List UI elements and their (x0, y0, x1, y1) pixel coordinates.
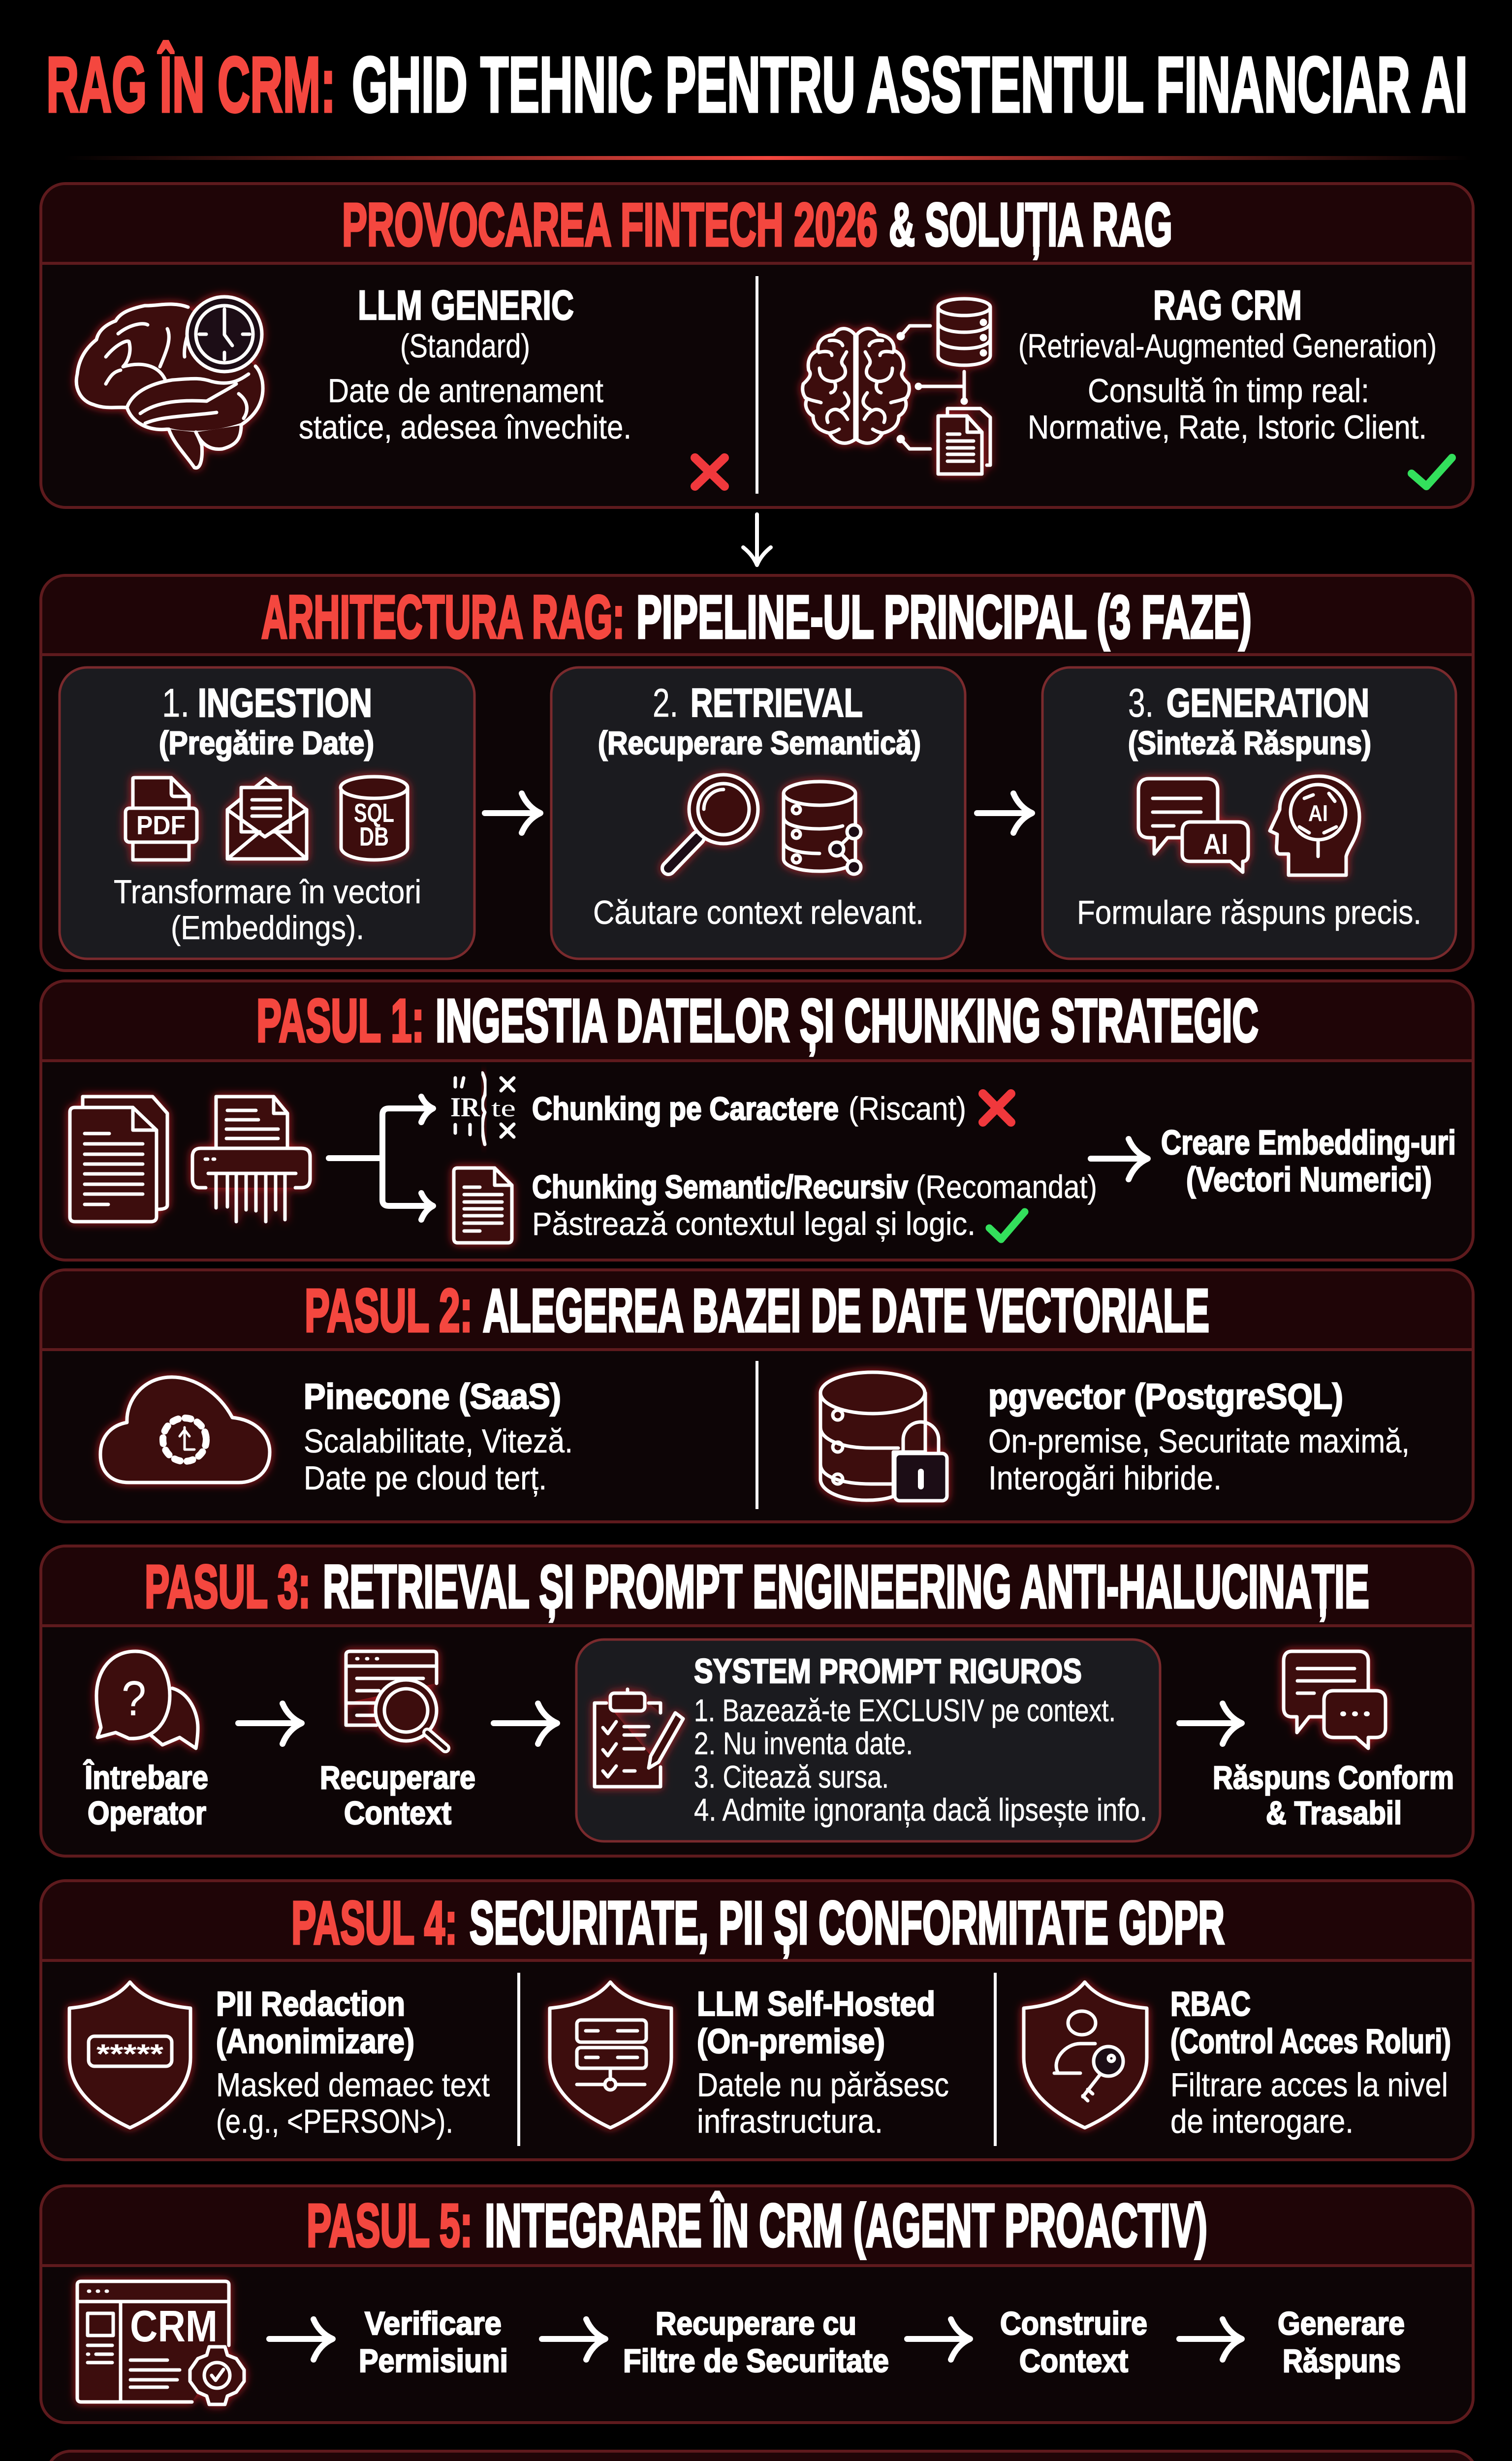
icon: shredder (192, 1097, 310, 1222)
text: pii redaction: PII Redaction (216, 1985, 405, 2023)
text: recuperare filtre: Filtre de Securitate (623, 2342, 889, 2379)
text: verificare permisiuni: Verificare (365, 2305, 502, 2341)
text: chunking semantic: (Recomandat) (916, 1168, 1097, 1205)
arrow: step 3 (1179, 1704, 1242, 1744)
text: chunking semantic: Chunking Semantic/Recursiv (532, 1168, 908, 1205)
text: rag crm (1018, 282, 1437, 446)
icon: shield server (550, 1982, 671, 2128)
icon: shield password (69, 1982, 190, 2128)
text: chunking pe caractere: (Riscant) (849, 1090, 966, 1127)
text: pii redaction (216, 1985, 490, 2140)
panel: concluzii (46, 2451, 1477, 2461)
text: raspuns conform: Răspuns Conform (1213, 1759, 1454, 1796)
text: pinecone (304, 1377, 573, 1497)
heading: pasul 5: PASUL 5: (307, 2192, 472, 2260)
panel: pasul 1 (41, 981, 1473, 1260)
icon: database with nodes (784, 782, 861, 874)
icon: documents (70, 1097, 167, 1222)
icon: database with lock (820, 1372, 947, 1501)
card: system prompt: 3. Citează sursa. (694, 1759, 889, 1795)
text: chunking semantic (532, 1168, 1097, 1242)
text: creare embedding (1161, 1123, 1456, 1199)
icon: cloud (100, 1377, 270, 1483)
icon: shield password: ***** (96, 2038, 163, 2069)
text: pgvector (988, 1377, 1410, 1497)
icon: sql db: DB (359, 822, 389, 852)
icon: document (454, 1168, 512, 1243)
panel: pasul 4 (41, 1881, 1473, 2160)
text: intrebare operator (83, 1759, 208, 1831)
arrow: down (743, 514, 771, 565)
arrow: d (1179, 2319, 1242, 2360)
card: ingestion: INGESTION (198, 681, 372, 726)
icon: red x (983, 1094, 1011, 1122)
icon: magnifier (668, 775, 758, 868)
arrow: a (269, 2319, 333, 2360)
text: llm self-hosted (697, 1985, 949, 2140)
icon: chat ai (1138, 779, 1248, 872)
text: llm generic: (Standard) (400, 327, 530, 365)
text: llm self-hosted: infrastructura. (697, 2103, 883, 2140)
text: pinecone: Pinecone (SaaS) (304, 1377, 561, 1417)
text: rag crm: Normative, Rate, Istoric Client. (1028, 409, 1427, 446)
text: verificare permisiuni: Permisiuni (359, 2342, 508, 2379)
icon: question bubbles (96, 1651, 198, 1748)
icon: answer bubbles (1284, 1651, 1386, 1748)
card: system prompt (576, 1640, 1160, 1841)
icon: envelope (227, 779, 307, 859)
heading: pasul 1 (256, 987, 1259, 1055)
text: rbac: RBAC (1170, 1985, 1251, 2023)
title: RAG ÎN CRM: (46, 40, 336, 128)
card: system prompt: SYSTEM PROMPT RIGUROS (694, 1652, 1082, 1690)
text: creare embedding: (Vectori Numerici) (1186, 1160, 1432, 1199)
text: chunking semantic: Păstrează contextul legal și logic. (532, 1205, 976, 1242)
text: llm generic: Date de antrenament (328, 372, 603, 410)
icon: shield rbac (1024, 1982, 1147, 2128)
heading: arhitectura: ARHITECTURA RAG: (261, 584, 625, 651)
card: retrieval (551, 667, 965, 959)
icon: clipboard (595, 1689, 683, 1787)
icon: ai head (1270, 776, 1359, 875)
card: ingestion: (Embeddings). (171, 909, 364, 947)
heading: pasul 5 (307, 2192, 1207, 2260)
heading: pasul 2: PASUL 2: (305, 1277, 472, 1345)
text: rbac: Filtrare acces la nivel (1170, 2066, 1448, 2104)
text: generare raspuns: Generare (1278, 2305, 1405, 2341)
text: pii redaction: (Anonimizare) (216, 2022, 414, 2060)
text: construire context: Context (1019, 2342, 1128, 2379)
text: pii redaction: Masked demaec text (216, 2066, 490, 2104)
card: retrieval: 2. (653, 681, 678, 726)
heading: pasul 4 (291, 1890, 1225, 1957)
card: ingestion: 1. (162, 681, 189, 726)
text: recuperare filtre: Recuperare cu (656, 2305, 856, 2341)
text: intrebare operator: Operator (88, 1795, 206, 1831)
arrow: fork (329, 1097, 433, 1220)
text: rag crm: RAG CRM (1153, 282, 1302, 328)
icon: chat ai: AI (1203, 828, 1228, 860)
card: generation: 3. (1128, 681, 1154, 726)
text: generare raspuns (1278, 2305, 1405, 2379)
panel: arhitectura rag (41, 575, 1473, 971)
text: verificare permisiuni (359, 2305, 508, 2379)
text: construire context (1000, 2305, 1147, 2379)
heading: pasul 1: PASUL 1: (256, 987, 424, 1055)
text: intrebare operator: Întrebare (83, 1759, 208, 1796)
text: construire context: Construire (1000, 2305, 1147, 2341)
card: retrieval: (Recuperare Semantică) (598, 725, 921, 761)
text: generare raspuns: Răspuns (1283, 2342, 1401, 2379)
icon: character chunks: IR (450, 1092, 480, 1123)
icon: red x (695, 458, 724, 486)
heading: pasul 3: PASUL 3: (145, 1553, 311, 1621)
arrow: step 1 (238, 1704, 302, 1744)
card: retrieval: Căutare context relevant. (593, 894, 924, 931)
icon: character chunks: te (491, 1094, 516, 1122)
text: llm self-hosted: LLM Self-Hosted (697, 1985, 935, 2023)
heading: provocarea: PROVOCAREA FINTECH 2026 (342, 191, 878, 259)
icon: brain with database and documents (803, 299, 990, 474)
text: recuperare context: Context (344, 1795, 451, 1831)
card: system prompt: 1. Bazează-te EXCLUSIV pe context. (694, 1693, 1116, 1728)
panel: pasul 5 (41, 2186, 1473, 2423)
text: llm self-hosted: Datele nu părăsesc (697, 2066, 949, 2104)
text: recuperare context (320, 1759, 475, 1831)
arrow: retrieval to generation (977, 793, 1032, 833)
text: pgvector: pgvector (PostgreSQL) (988, 1377, 1343, 1417)
arrow: to embeddings (1091, 1139, 1148, 1179)
icon: search window (346, 1651, 445, 1748)
heading: pasul 4: PASUL 4: (291, 1890, 457, 1957)
text: raspuns conform: & Trasabil (1266, 1795, 1402, 1831)
card: system prompt: 2. Nu inventa date. (694, 1726, 913, 1761)
text: recuperare filtre (623, 2305, 889, 2379)
icon: pdf (126, 778, 197, 860)
panel: pasul 2 (41, 1270, 1473, 1522)
card: ingestion (60, 667, 474, 959)
heading: arhitectura (261, 584, 1252, 651)
text: pgvector: Interogări hibride. (988, 1459, 1222, 1497)
icon: character chunks (450, 1073, 516, 1144)
panel: provocarea fintech (41, 184, 1473, 507)
arrow: c (907, 2319, 970, 2360)
icon: green check (1412, 458, 1452, 486)
heading: concluzii (352, 2460, 1164, 2461)
heading: pasul 2 (305, 1277, 1209, 1345)
icon: crm window: CRM (130, 2302, 218, 2351)
text: llm generic (299, 282, 631, 446)
text: pinecone: Scalabilitate, Viteză. (304, 1422, 573, 1460)
text: chunking pe caractere: Chunking pe Caractere (532, 1090, 839, 1127)
icon: ai head: AI (1308, 800, 1328, 826)
text: pii redaction: (e.g., <PERSON>). (216, 2103, 453, 2140)
text: pinecone: Date pe cloud terț. (304, 1459, 547, 1497)
arrow: b (542, 2319, 605, 2360)
card: generation (1042, 667, 1456, 959)
card: ingestion: (Pregătire Date) (159, 725, 374, 761)
arrow: ingestion to retrieval (485, 793, 540, 833)
card: system prompt: 4. Admite ignoranța dacă lipsește info. (694, 1792, 1147, 1828)
text: llm generic: LLM GENERIC (358, 282, 574, 328)
icon: question bubbles: ? (122, 1671, 146, 1726)
heading: provocarea: & SOLUȚIA RAG (889, 191, 1172, 259)
icon: sql db: SQL (354, 798, 394, 828)
text: recuperare context: Recuperare (320, 1759, 475, 1796)
card: generation: (Sinteză Răspuns) (1128, 725, 1371, 761)
arrow: step 2 (494, 1704, 557, 1744)
text: llm self-hosted: (On-premise) (697, 2022, 885, 2060)
icon: sql db (341, 777, 408, 860)
text: raspuns conform (1213, 1759, 1454, 1831)
text: pgvector: On-premise, Securitate maximă, (988, 1422, 1410, 1460)
icon: green check (989, 1212, 1025, 1239)
icon: brain with clock (76, 297, 263, 468)
card: generation: GENERATION (1166, 681, 1369, 726)
text: rbac: de interogare. (1170, 2103, 1354, 2140)
card: ingestion: Transformare în vectori (114, 873, 421, 911)
panel: pasul 3 (41, 1546, 1473, 1856)
text: rbac (1170, 1985, 1451, 2140)
card: retrieval: RETRIEVAL (691, 681, 863, 726)
text: llm generic: statice, adesea învechite. (299, 409, 631, 446)
text: rag crm: Consultă în timp real: (1088, 372, 1369, 410)
icon: pdf: PDF (136, 811, 186, 840)
icon: crm window (77, 2281, 244, 2404)
card: generation: Formulare răspuns precis. (1077, 894, 1421, 931)
